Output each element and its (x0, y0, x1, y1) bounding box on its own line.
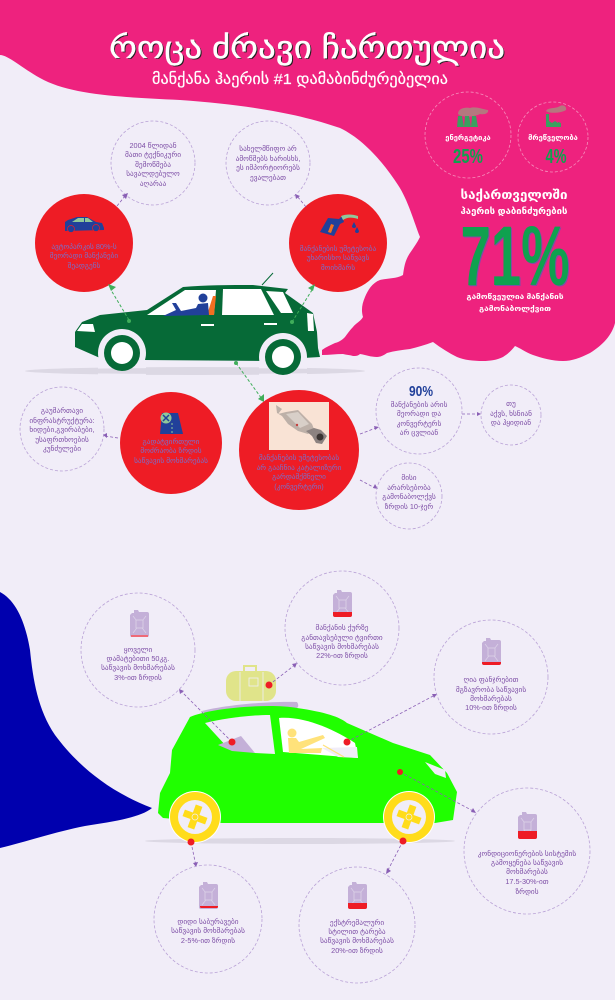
value: 25%: 25% (453, 146, 483, 168)
callout: removed and sold: თუ (506, 399, 516, 408)
icon: car (65, 217, 104, 232)
callout: inspection: აღარაა (140, 179, 166, 188)
panel: catalytic converter red circle: არ გააჩნია კატალიზური (257, 463, 342, 472)
callout: extreme driving: 20%-ით ზრდის (331, 946, 383, 955)
icon: road (160, 412, 183, 434)
panel: used cars red circle: მეორადი მანქანები (50, 251, 118, 260)
panel: low-quality fuel red circle (289, 194, 387, 292)
callout: 90%: კონვერტერს (397, 419, 441, 428)
panel: industry sector (518, 102, 588, 172)
dashed connectors with red markers (179, 663, 476, 874)
callout: extreme driving: ექსტრემალური (330, 918, 384, 927)
callout: inspection: მათი ტექნიკური (125, 150, 181, 159)
label: industry: მრეწველობა (528, 133, 578, 142)
rear wheel (169, 791, 221, 843)
callout: tenfold: მისი (401, 473, 417, 482)
subtitle: მანქანა ჰაერის #1 დამაბინძურებელია (152, 71, 448, 88)
callout: open windows: მგზავრობა საწვავის (456, 685, 526, 694)
panel: used cars red circle: შეადგენს (68, 261, 101, 270)
callout: infrastructure: გაუმართავი (41, 406, 83, 415)
title: როცა ძრავი ჩართულია (110, 31, 506, 66)
callout: tenfold (376, 463, 442, 529)
blue exhaust cloud (0, 592, 152, 848)
panel: catalytic converter red circle: (კონვერტერი) (274, 482, 324, 491)
panel: traffic red circle: საწვავის მოხმარებას (134, 456, 208, 465)
caption: 71%: გამონაბოლქვით (479, 304, 551, 313)
callout: roof load: მანქანის ქურზე (316, 623, 369, 632)
callout: inspection: შემოწმება (135, 160, 171, 169)
panel: used cars red circle (35, 194, 133, 292)
callout: 50kg extra weight: დამატებითი 50კგ. (107, 654, 169, 663)
callout: roof load: 22%-ით ზრდის (316, 651, 368, 660)
label: energy: ენერგეტიკა (445, 133, 491, 142)
callout: large tyres: საწვავის მოხმარებას (171, 926, 245, 935)
callout: 90%: 90% (409, 383, 433, 400)
panel: traffic red circle: მოძრაობა ზრდის (140, 446, 202, 455)
image: catalytic converter (269, 402, 329, 450)
panel: catalytic converter red circle: მანქანების უმეტესობას (259, 453, 339, 462)
callout: 90%: არ ცვლიან (400, 428, 438, 437)
headline: Georgia (460, 188, 568, 216)
panel: catalytic converter red circle: გარდამქმნელი (272, 472, 326, 481)
headline: Georgia: საქართველოში (460, 188, 568, 202)
callout: infrastructure: ხიდები,გვირაბები, (29, 425, 95, 434)
callout: 90%: მეორადი და (397, 409, 441, 418)
arrows from converter (360, 412, 481, 489)
callout: extreme driving (299, 867, 415, 983)
callout: large tyres: დიდი საბურავები (177, 917, 239, 926)
callout: open windows: 10%-ით ზრდის (465, 703, 517, 712)
callout: 50kg extra weight: 3%-ით ზრდის (114, 673, 162, 682)
icon: power plant (457, 107, 488, 127)
callout: infrastructure: უსაფრთხოების (35, 435, 89, 444)
caption: 71% (466, 292, 564, 313)
callout: roof load: განთავსებული ტვირთი (301, 633, 383, 642)
callout: roof load (285, 571, 399, 685)
callout: infrastructure: კუნძულები (43, 444, 81, 453)
green dashed arrows (108, 284, 315, 402)
callout: 50kg extra weight: საწვავის მოხმარებას (101, 663, 175, 672)
value: 4%: 4% (546, 146, 567, 168)
panel: traffic red circle: გადატვირთული (143, 437, 200, 446)
panel: energy sector (425, 92, 511, 178)
callout: quality: ამოწმებს ხარისხს, (236, 154, 300, 163)
callout: tenfold: არარსებობა (387, 483, 431, 492)
callout: infrastructure: ინფრასტრუქტურა: (29, 416, 95, 425)
callout: open windows (434, 620, 548, 734)
panel: catalytic converter red circle (239, 390, 359, 510)
illustration: bright green car (145, 666, 457, 844)
front wheel (383, 791, 435, 843)
arrow: congestion to infrastructure (103, 433, 118, 438)
title: როცა ძრავი ჩართულია (109, 30, 505, 65)
callout: infrastructure (20, 387, 104, 471)
callout: large tyres: 2-5%-ით ზრდის (181, 936, 235, 945)
callout: extreme driving: სტილით ტარება (328, 927, 386, 936)
callout: removed and sold: აქვს, ხსნიან (490, 409, 532, 418)
callout: open windows: ღია ფანჯრებით (463, 675, 519, 684)
panel: used cars red circle: ავტოპარკის 80%-ს (51, 242, 117, 251)
callout: quality: ეს იმპორტიორებს (236, 163, 300, 172)
callout: inspection (111, 121, 195, 205)
callout: removed and sold (481, 385, 541, 445)
panel: low-quality fuel red circle: უხარისხო საწვავს (307, 253, 369, 262)
pink smoke cloud (0, 0, 615, 361)
callout: quality: სახელმწიფო არ (239, 144, 297, 153)
callout: tenfold: გამონაბოლქვს (382, 492, 436, 501)
callout: removed and sold: და ჰყიდიან (491, 418, 531, 427)
driver (163, 294, 216, 316)
callout: air conditioner: ზრდის (515, 887, 539, 896)
illustration: green car with driver (25, 273, 365, 381)
callout: 90% (376, 368, 462, 454)
callout: air conditioner (464, 788, 590, 914)
callout: roof load: საწვავის მოხმარებას (305, 642, 379, 651)
callout: 50kg extra weight (81, 593, 195, 707)
panel: low-quality fuel red circle: მანქანების უმეტესობა (300, 244, 377, 253)
luggage (226, 666, 276, 702)
callout: large tyres (154, 865, 262, 973)
callout: inspection: 2004 წლიდან (129, 141, 177, 150)
callout: air conditioner: გამოყენება საწვავის (491, 858, 563, 867)
callout: air conditioner: კონდიციონერების სისტემის (478, 849, 576, 858)
headline: Georgia: ჰაერის დაბინძურების (460, 206, 568, 216)
icon: fuel nozzle (320, 214, 359, 236)
driver (288, 728, 344, 757)
panel: traffic red circle (120, 392, 222, 494)
icon: factory (546, 105, 566, 127)
callout: tenfold: ზრდის 10-ჯერ (385, 502, 433, 511)
callout: 50kg extra weight: ყოველი (124, 645, 152, 654)
callout: inspection: სავალდებულო (126, 169, 180, 178)
callout: quality: ევალებათ (250, 173, 286, 182)
panel: low-quality fuel red circle: მოიხმარს (321, 263, 355, 272)
callout: 90%: მანქანების არის (391, 400, 448, 409)
callout: quality (226, 121, 310, 205)
caption: 71%: გამოწვეულია მანქანის (466, 292, 564, 301)
callout: air conditioner: მოხმარებას (506, 867, 548, 876)
callout: open windows: მოხმარებას (470, 694, 512, 703)
arrows from top callouts (117, 193, 306, 207)
callout: air conditioner: 17.5-30%-ით (505, 877, 549, 886)
callout: extreme driving: საწვავის მოხმარებას (320, 936, 394, 945)
